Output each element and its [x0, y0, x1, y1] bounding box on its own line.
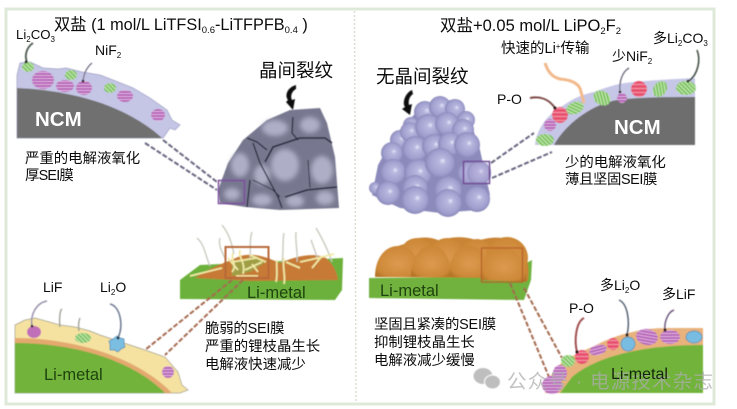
heading: dual salt: 0.4	[285, 25, 298, 36]
label: Li2CO3: 2	[26, 35, 31, 44]
caption: less oxidation: 薄且坚固SEI膜	[565, 171, 657, 188]
label: Li2CO3: CO	[31, 27, 50, 42]
diagram: dense SEI on Li metal	[542, 300, 703, 394]
label: more Li2CO3: 多Li	[653, 30, 678, 46]
watermark text: 公众号 · 电源技术杂志	[507, 371, 714, 393]
caption: brittle SEI: 电解液快速减少	[205, 356, 306, 373]
label: Li-metal: Li-metal	[380, 282, 439, 300]
heading: dual salt: -LiTFPFB	[215, 16, 285, 34]
label: intergranular cracks: 晶间裂纹	[259, 60, 334, 81]
label: fast Li+ transport: +	[556, 42, 561, 51]
caption: dense SEI: 电解液减少缓慢	[374, 352, 475, 369]
label: Li2O: 2	[111, 288, 116, 297]
diagram: thin SEI on NCM	[530, 50, 699, 146]
label: more Li2CO3: 3	[703, 39, 708, 48]
centre divider	[354, 11, 356, 403]
label: more Li2CO3: 2	[678, 39, 683, 48]
label: Li2CO3: 3	[50, 35, 56, 44]
label: Li2CO3: Li	[16, 27, 26, 42]
heading: additive: 双盐+0.05 mol/L LiPO	[440, 17, 600, 35]
label: NiF2: 2	[117, 51, 122, 60]
label: more Li2O: O	[629, 277, 640, 293]
label: Li-metal: Li-metal	[44, 366, 103, 384]
label: Li-metal: Li-metal	[611, 366, 668, 383]
zoom lines: particle to cathode	[491, 133, 552, 178]
zoom lines: cathode to particle	[145, 140, 217, 190]
label: more Li2CO3: CO	[682, 30, 703, 46]
label: more Li2O: 2	[625, 286, 630, 295]
label: NCM: NCM	[35, 108, 82, 131]
inset box: orange	[226, 247, 268, 278]
icon: chat bubbles	[474, 368, 500, 389]
caption: severe oxidation: 严重的电解液氧化	[25, 150, 140, 167]
label: fast Li+ transport: 传输	[560, 40, 590, 57]
arrow: to smooth particle	[402, 90, 413, 115]
inset box: orange	[482, 248, 522, 282]
smooth particle	[369, 96, 491, 217]
panel: dual salt cathode	[16, 16, 339, 210]
caption: dense SEI: 坚固且紧凑的SEI膜	[374, 316, 496, 333]
inset box: purple	[464, 162, 490, 184]
label: less NiF2: 少NiF	[612, 48, 648, 64]
label: NCM: NCM	[614, 116, 661, 139]
caption: dense SEI: 抑制锂枝晶生长	[374, 334, 475, 351]
diagram: brittle SEI on Li metal	[15, 301, 188, 393]
label: P-O: P-O	[569, 300, 594, 316]
label: more Li2O: 多Li	[600, 277, 625, 293]
cracked particle	[218, 108, 339, 210]
heading: additive: 2	[616, 26, 621, 37]
label: fast Li+ transport: 快速的Li	[501, 41, 556, 57]
inset box: purple	[218, 180, 244, 204]
zoom lines: block to SEI	[510, 283, 562, 377]
panel: additive lithium anode	[369, 237, 714, 394]
heading: additive: F	[606, 17, 616, 35]
zoom lines: dendrite to SEI	[145, 280, 243, 355]
dendrite block	[180, 225, 343, 300]
label: NiF2: NiF	[95, 42, 117, 58]
label: Li2O: Li	[100, 279, 111, 295]
caption: brittle SEI: 脆弱的SEI膜	[205, 319, 284, 337]
label: LiF: LiF	[43, 279, 62, 295]
heading: dual salt: 0.6	[202, 25, 215, 36]
label: no intergranular cracks: 无晶间裂纹	[376, 66, 469, 87]
label: Li-metal: Li-metal	[247, 284, 306, 302]
label: less NiF2: 2	[648, 57, 653, 66]
watermark	[474, 368, 714, 393]
label: P-O: P-O	[497, 91, 522, 107]
heading: dual salt: )	[298, 16, 308, 34]
diagram: thick SEI on NCM	[17, 43, 180, 138]
orange granule block	[369, 237, 532, 300]
caption: less oxidation: 少的电解液氧化	[565, 154, 666, 171]
label: Li2O: O	[115, 279, 126, 295]
arrow: to cracked particle	[286, 85, 296, 110]
caption: brittle SEI: 严重的锂枝晶生长	[205, 338, 320, 355]
panel: dual salt plus LiPO2F2 cathode	[369, 16, 708, 217]
label: more LiF: 多LiF	[662, 286, 695, 302]
panel: dual salt lithium anode	[15, 225, 343, 393]
heading: dual salt: 双盐 (1 mol/L LiTFSI	[54, 16, 202, 34]
caption: severe oxidation: 厚SEI膜	[25, 167, 73, 184]
heading: additive: 2	[600, 26, 606, 37]
